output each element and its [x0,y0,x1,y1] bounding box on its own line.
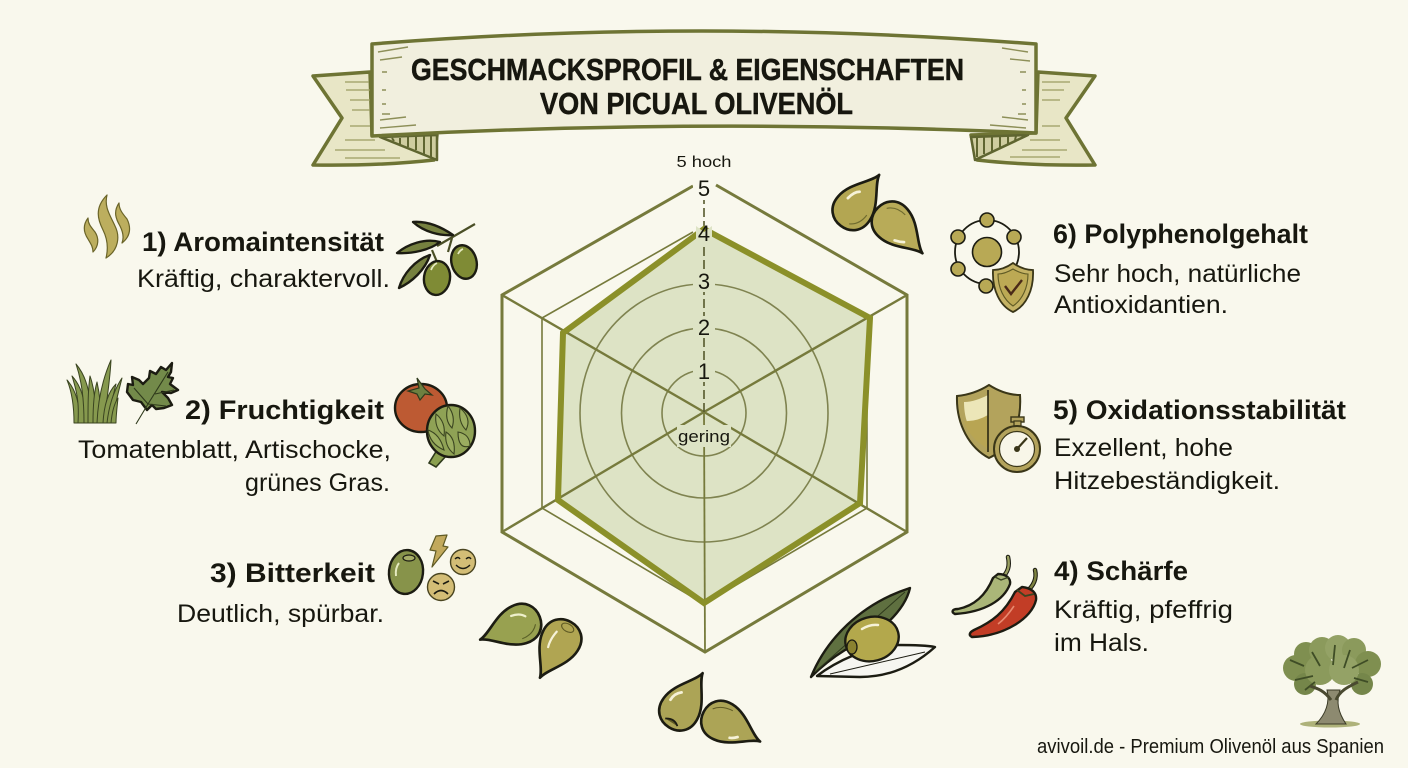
icon: green olive [387,548,425,596]
axis labels: 3 [698,269,710,294]
description: Exzellent, hohe [1054,434,1233,462]
item 4: Schärfe [953,556,1233,657]
description: Deutlich, spürbar. [177,600,384,628]
item 5: Oxidationsstabilität [957,385,1346,495]
icon: stopwatch [994,417,1040,472]
item 1: Aromaintensität [84,195,480,297]
range rings [580,284,828,542]
description: Tomatenblatt, Artischocke, [78,436,391,464]
icon: lightning bolt [430,535,448,567]
icon: olive pair bottom center [652,663,769,759]
axis labels: 5 [698,176,710,201]
heading: 2) Fruchtigkeit [185,395,384,425]
axis spokes [502,200,907,652]
axis labels: 2 [698,315,710,340]
icon: green chili [953,557,1010,614]
item 3: Bitterkeit [177,535,476,628]
radar chart [502,154,907,652]
item 6: Polyphenolgehalt: Antioxidantien. [1054,291,1228,319]
inner hexagon grid [542,232,867,604]
title text: GESCHMACKSPROFIL & EIGENSCHAFTEN [411,52,964,87]
data area [558,229,870,603]
canopy [1283,635,1381,695]
icon: smiling face [450,550,476,574]
icon: artichoke [427,405,475,467]
footer credit: avivoil.de - Premium Olivenöl aus Spanien [1037,736,1384,758]
icon: olive pair bottom left [473,598,588,687]
axis labels: 5 hoch [676,154,732,171]
icon: red chili [970,570,1036,637]
item 2: Fruchtigkeit [67,360,475,497]
scale number backgrounds [677,173,731,447]
item 6: Polyphenolgehalt [951,213,1308,319]
description: Kräftig, charaktervoll. [137,265,390,293]
icon: olive pair top right [825,163,937,267]
icon: parsley leaf [127,363,178,424]
item 5: Oxidationsstabilität: Hitzebeständigkeit. [1054,467,1280,495]
icon: grass [67,360,122,423]
banner: title ribbon: VON PICUAL OLIVENÖL [540,86,853,121]
axis labels [676,154,732,446]
axis labels: gering [678,427,730,446]
heading: 4) Schärfe [1054,556,1188,586]
description: Kräftig, pfeffrig [1054,596,1233,624]
item 2: Fruchtigkeit: grünes Gras. [245,469,390,497]
heading: 1) Aromaintensität [142,227,384,257]
icon: tomato [395,378,447,432]
right ribbon tail [971,72,1095,165]
item 4: Schärfe: im Hals. [1054,629,1149,657]
banner: title ribbon [313,31,1095,165]
icon: molecule with shield [951,213,1033,312]
data outline [558,229,870,603]
icon: olive branch [397,222,480,297]
trunk [1316,690,1346,724]
right fold [971,135,1028,160]
icon: olive tree [1283,635,1381,728]
ribbon main panel [372,31,1036,136]
heading: 3) Bitterkeit [210,558,375,588]
icon: shield [957,385,1020,458]
icon: olive with leaves [811,588,935,677]
left fold [380,135,437,160]
outer hexagon grid [502,185,907,652]
left ribbon tail [313,72,437,165]
heading: 5) Oxidationsstabilität [1053,395,1346,425]
axis labels: 1 [698,359,710,384]
heading: 6) Polyphenolgehalt [1053,219,1308,249]
axis labels: 4 [698,221,710,246]
description: Sehr hoch, natürliche [1054,260,1301,288]
icon: aroma waves [84,195,130,258]
icon: angry face [428,574,454,600]
